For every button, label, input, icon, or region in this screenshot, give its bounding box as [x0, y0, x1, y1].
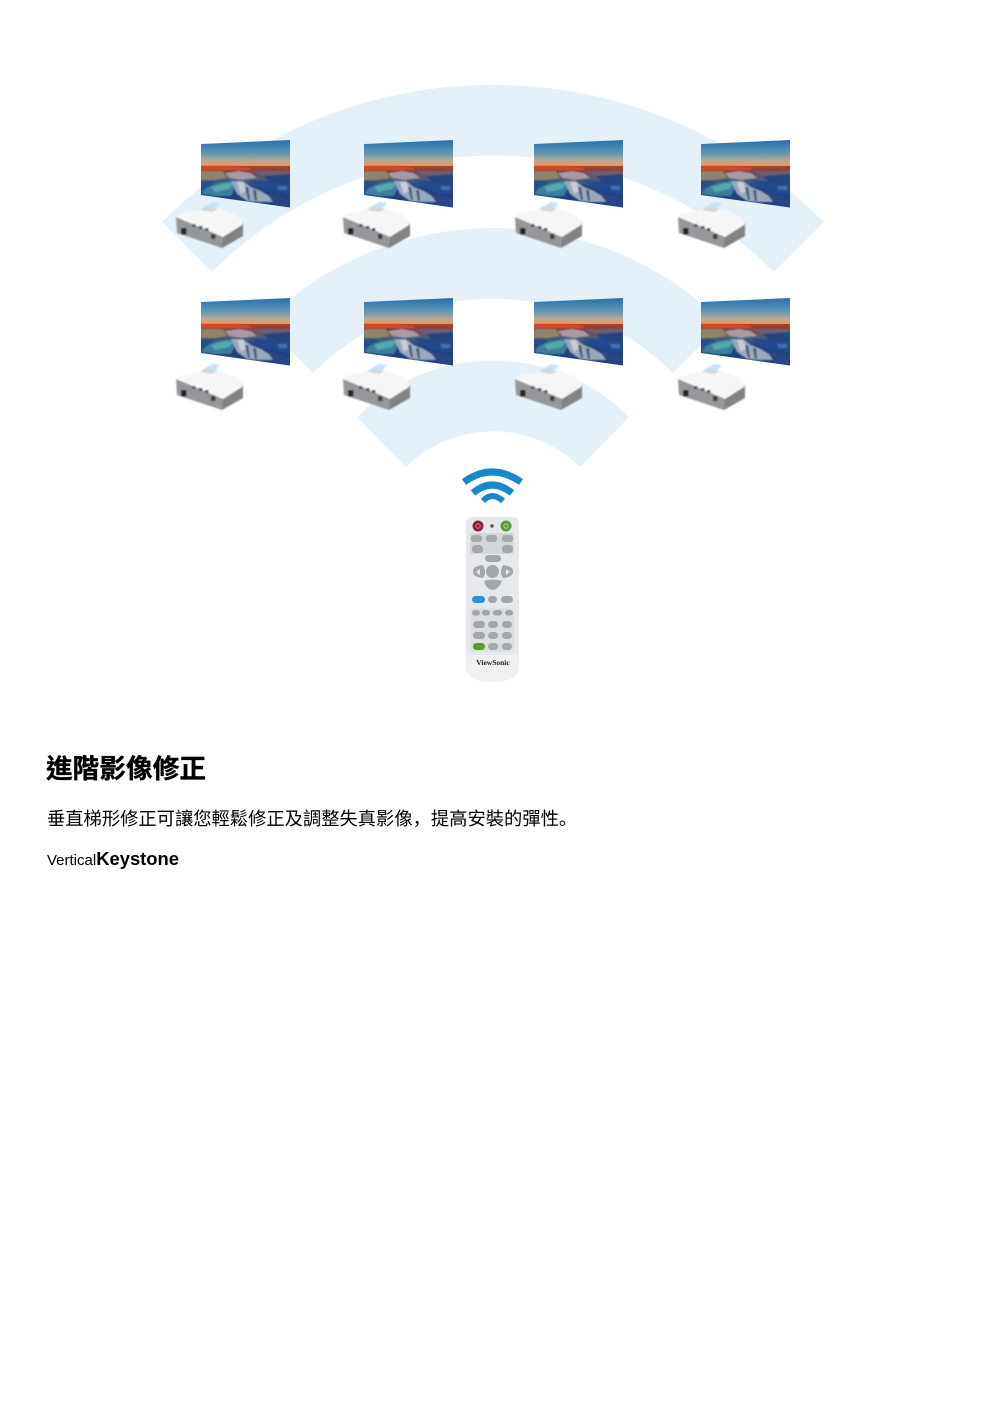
screen 2 — [364, 140, 453, 208]
panel: top row of projectors with screens — [176, 140, 790, 248]
projector 6 — [343, 364, 410, 410]
screen 4 — [701, 140, 790, 208]
projector 1 — [176, 202, 243, 248]
projector 8 — [678, 364, 745, 410]
screen 5 — [201, 298, 290, 366]
projector 3 — [515, 202, 582, 248]
icon: wifi signal — [464, 472, 521, 501]
screen 7 — [534, 298, 623, 366]
projector 2 — [343, 202, 410, 248]
description text: 垂直梯形修正可讓您輕鬆修正及調整失真影像，提高安裝的彈性。 — [47, 808, 577, 829]
screen 1 — [201, 140, 290, 208]
projector 4 — [678, 202, 745, 248]
icon: remote control — [466, 517, 519, 682]
label: Vertical Keystone: VerticalKeystone — [47, 848, 179, 869]
icon: remote control: ViewSonic — [476, 658, 510, 667]
projector 5 — [176, 364, 243, 410]
large outer arc — [162, 85, 824, 272]
panel: wireless signal arcs — [162, 85, 824, 467]
panel: bottom row of projectors with screens — [176, 298, 790, 410]
small inner arc — [357, 361, 629, 467]
projector 7 — [515, 364, 582, 410]
screen 8 — [701, 298, 790, 366]
screen 6 — [364, 298, 453, 366]
screen 3 — [534, 140, 623, 208]
title: 進階影像修正 — [46, 754, 206, 784]
middle arc — [263, 228, 723, 373]
